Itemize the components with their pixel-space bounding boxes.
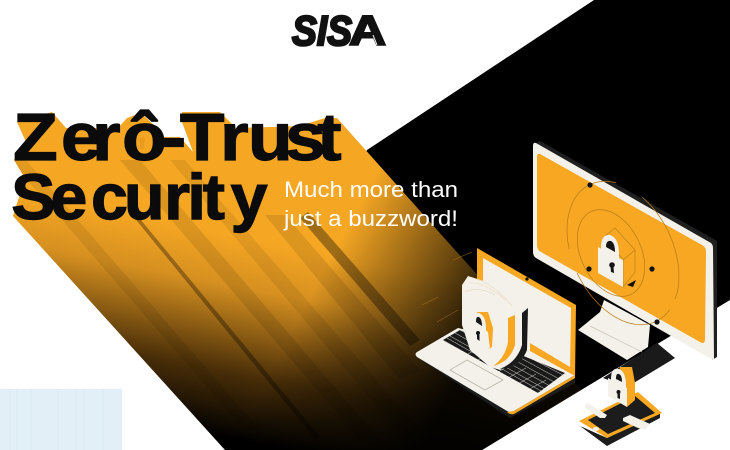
security rings [545,163,701,343]
icon: padlock on screen [598,228,636,287]
monitor stand [578,300,650,360]
logo: SISA: SIS [292,7,352,54]
logo: SISA: A [349,7,386,54]
laptop lid [477,248,576,378]
keyboard [443,328,565,394]
phone shadow [580,412,660,446]
phone body [579,392,662,438]
phone with padlock [579,367,662,446]
title: Zerô-Trust [13,100,342,174]
hinge [530,343,575,376]
monitor back edge [533,141,717,360]
title: Security [11,161,267,233]
monitor frame [533,143,714,360]
icon: padlock on shield [471,312,493,349]
orange long shadow [13,112,580,450]
shield [462,276,528,370]
phone home button [593,427,599,431]
camera [525,277,529,281]
subtitle: Much more than [284,177,458,202]
trackpad [450,360,503,390]
laptop base [416,328,575,412]
laptop shadow [418,358,575,418]
faint lines in the shadow [422,252,472,322]
padlock over phone [608,367,635,407]
subtitle: just a buzzword! [283,206,458,231]
subtitle [283,177,458,231]
title [11,100,342,233]
black diagonal band [225,0,730,450]
phone screen [588,396,655,434]
monitor [533,141,717,387]
pale blue rectangle [0,389,122,450]
laptop [416,248,576,418]
monitor shadow [603,343,675,387]
ring nodes [586,182,660,325]
monitor screen [537,154,706,343]
floating cards [585,403,607,418]
laptop screen [483,258,571,373]
icon: keyhole in title o [139,137,145,149]
